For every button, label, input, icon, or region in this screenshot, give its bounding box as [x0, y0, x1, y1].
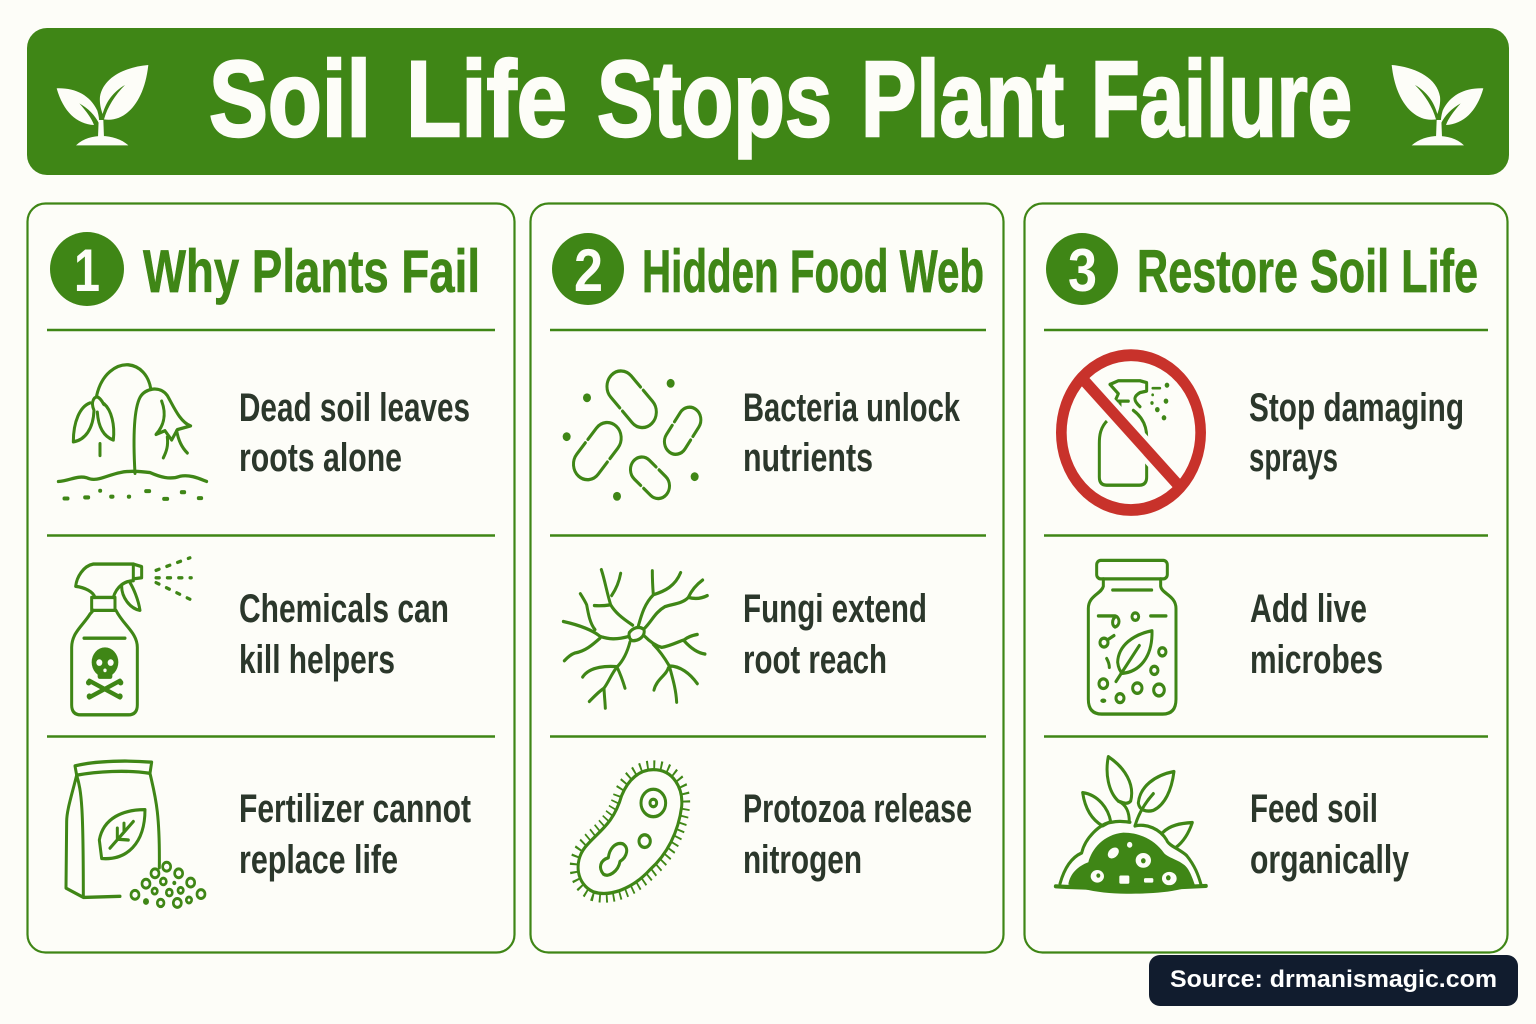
panel frame — [1024, 204, 1508, 952]
text: stop sprays: Stop damaging — [1249, 386, 1464, 430]
title text: Life — [406, 38, 567, 159]
heading: Why Plants Fail — [143, 238, 480, 305]
source badge: Source: drmanismagic.com — [1170, 966, 1497, 993]
text: feed soil: organically — [1250, 838, 1410, 882]
icon: no spraying sign — [1061, 355, 1201, 510]
number badge 2 — [552, 233, 624, 305]
text: feed soil: Feed soil — [1250, 787, 1378, 831]
text: bacteria: nutrients — [743, 436, 873, 480]
icon: protozoa — [578, 770, 682, 893]
number badge 1 — [50, 232, 124, 306]
icon: compost with sprouts — [1056, 757, 1206, 894]
icon: poison spray bottle — [72, 558, 191, 715]
panel: hidden food web — [530, 204, 1004, 952]
text: dead soil: roots alone — [239, 436, 402, 480]
heading: Hidden Food Web — [642, 238, 984, 305]
icon: fungi network — [563, 570, 707, 708]
text: fungi: Fungi extend — [743, 587, 927, 631]
text: add microbes: Add live — [1250, 587, 1367, 631]
text: protozoa: Protozoa release — [743, 787, 972, 831]
text: fertilizer: replace life — [239, 838, 398, 882]
text: add microbes: microbes — [1250, 638, 1383, 682]
icon: microbe jar — [1088, 560, 1176, 714]
title text: Failure — [1091, 38, 1352, 159]
text: bacteria: Bacteria unlock — [743, 386, 961, 430]
text: protozoa: nitrogen — [743, 838, 862, 882]
number badge 3 — [1046, 233, 1118, 305]
icon: right sprout — [1392, 65, 1483, 145]
panel frame — [28, 204, 514, 952]
icon: left sprout — [57, 65, 148, 145]
number badge 1: 1 — [74, 237, 100, 304]
text: fungi: root reach — [743, 638, 887, 682]
number badge 3: 3 — [1068, 237, 1097, 304]
text: chemicals: Chemicals can — [239, 587, 449, 631]
title text: Soil — [209, 38, 371, 159]
text: chemicals: kill helpers — [239, 638, 395, 682]
source badge — [1149, 955, 1518, 1006]
icon: bacteria — [563, 365, 705, 504]
text: fertilizer: Fertilizer cannot — [239, 787, 471, 831]
text: dead soil: Dead soil leaves — [239, 386, 470, 430]
number badge 2: 2 — [574, 237, 603, 304]
icon: fertilizer bag — [66, 761, 205, 907]
text: stop sprays: sprays — [1249, 436, 1338, 480]
panel: why plants fail — [28, 204, 514, 952]
title text: Stops — [597, 38, 832, 159]
title text: Plant — [861, 38, 1064, 159]
icon: wilted plant — [58, 365, 207, 499]
title banner — [27, 28, 1509, 175]
panel frame — [530, 204, 1004, 952]
panel: restore soil life — [1024, 204, 1508, 952]
